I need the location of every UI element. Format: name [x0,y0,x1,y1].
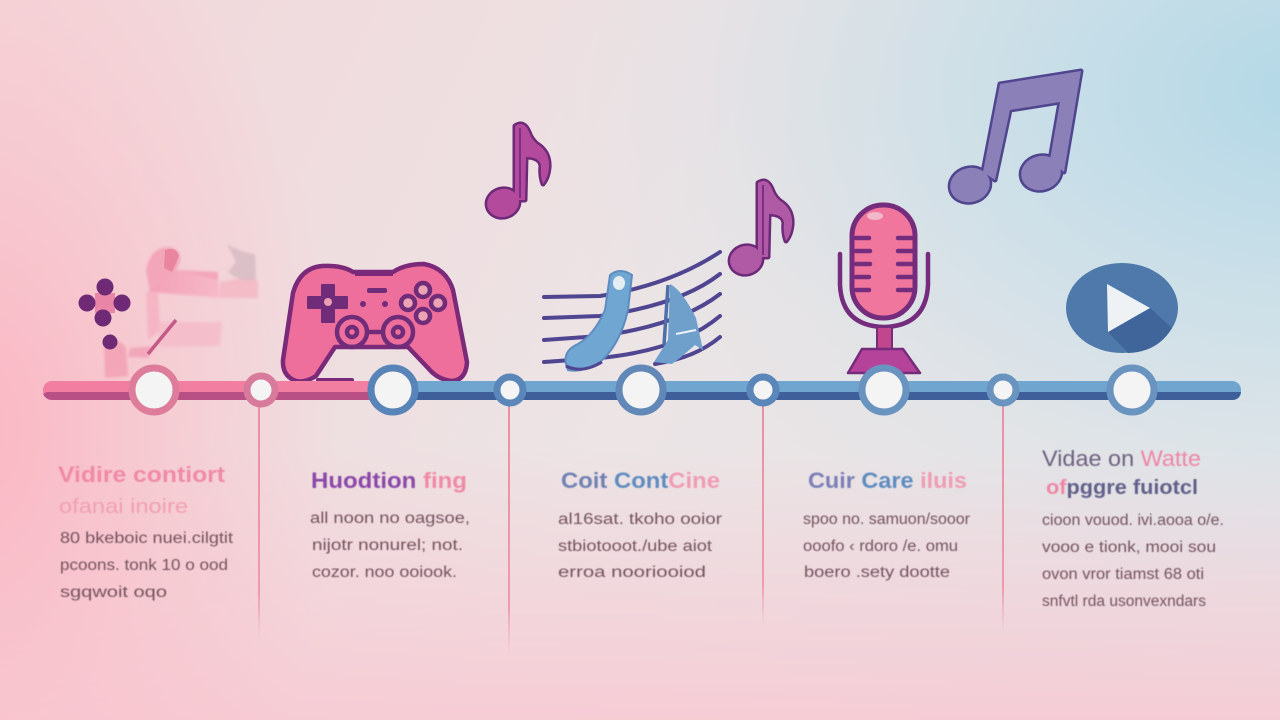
face buttons [401,283,445,323]
text block: step 4 [803,468,970,581]
icon: faded game controller ribbon [78,244,258,378]
text block: step 3: Coit ContCine [561,468,720,493]
text block: step 5: ovon vror tiamst 68 oti [1042,566,1204,583]
text block: step 1: Vidire contiort [58,462,226,487]
text block: step 4: boero .sety dootte [804,564,950,581]
analog sticks [337,317,413,347]
text block: step 4: spoo no. samuon/sooor [803,511,970,528]
text block: step 5: snfvtl rda usonvexndars [1042,593,1206,610]
icon: game controller [283,264,467,383]
icon: play button [1066,263,1178,353]
text block: step 3: al16sat. tkoho ooior [558,511,722,528]
icon: music note large violet [946,71,1081,207]
text block: step 3: stbiotooot./ube aiot [558,538,713,555]
icon: music note medium purple [727,181,792,278]
text block: step 4: ooofo ‹ rdoro /e. omu [803,538,958,555]
text block: step 1: sgqwoit oqo [60,584,167,601]
text block: step 5: ofpggre fuiotcl [1046,477,1198,499]
text block: step 2 [310,468,470,581]
text block: step 1: pcoons. tonk 10 o ood [60,557,228,574]
icon: d-pad buttons [78,278,130,350]
text block: step 2: cozor. noo ooiook. [312,564,457,581]
timeline nodes [132,368,1154,412]
text block: step 1: 80 bkeboic nuei.cilgtit [60,530,234,547]
blue segment [383,381,1241,400]
text block: step 1 [58,462,234,601]
text block: step 2: nijotr nonurel; not. [312,537,463,554]
d-pad [308,285,347,322]
icon: microphone [840,205,928,373]
timeline bar [43,368,1241,412]
vertical connector lines [258,405,1004,655]
text block: step 5: Vidae on Watte [1042,446,1201,471]
text block: step 3: erroa nooriooiod [558,564,706,581]
text block: step 5: cioon vouod. ivi.aooa o/e. [1042,512,1224,529]
text block: step 5 [1042,446,1224,610]
pink segment [43,381,383,400]
icon: music note small pink [484,124,549,221]
text block: step 2: all noon no oagsoe, [310,510,470,527]
text block: step 4: Cuir Care iluis [808,468,967,493]
icon: musical staff with blue notes [544,252,720,371]
text block: step 3 [558,468,722,581]
text block: step 2: Huodtion fing [311,468,467,493]
text block: step 5: vooo e tionk, mooi sou [1042,539,1216,556]
text block: step 1: ofanai inoire [59,496,188,518]
